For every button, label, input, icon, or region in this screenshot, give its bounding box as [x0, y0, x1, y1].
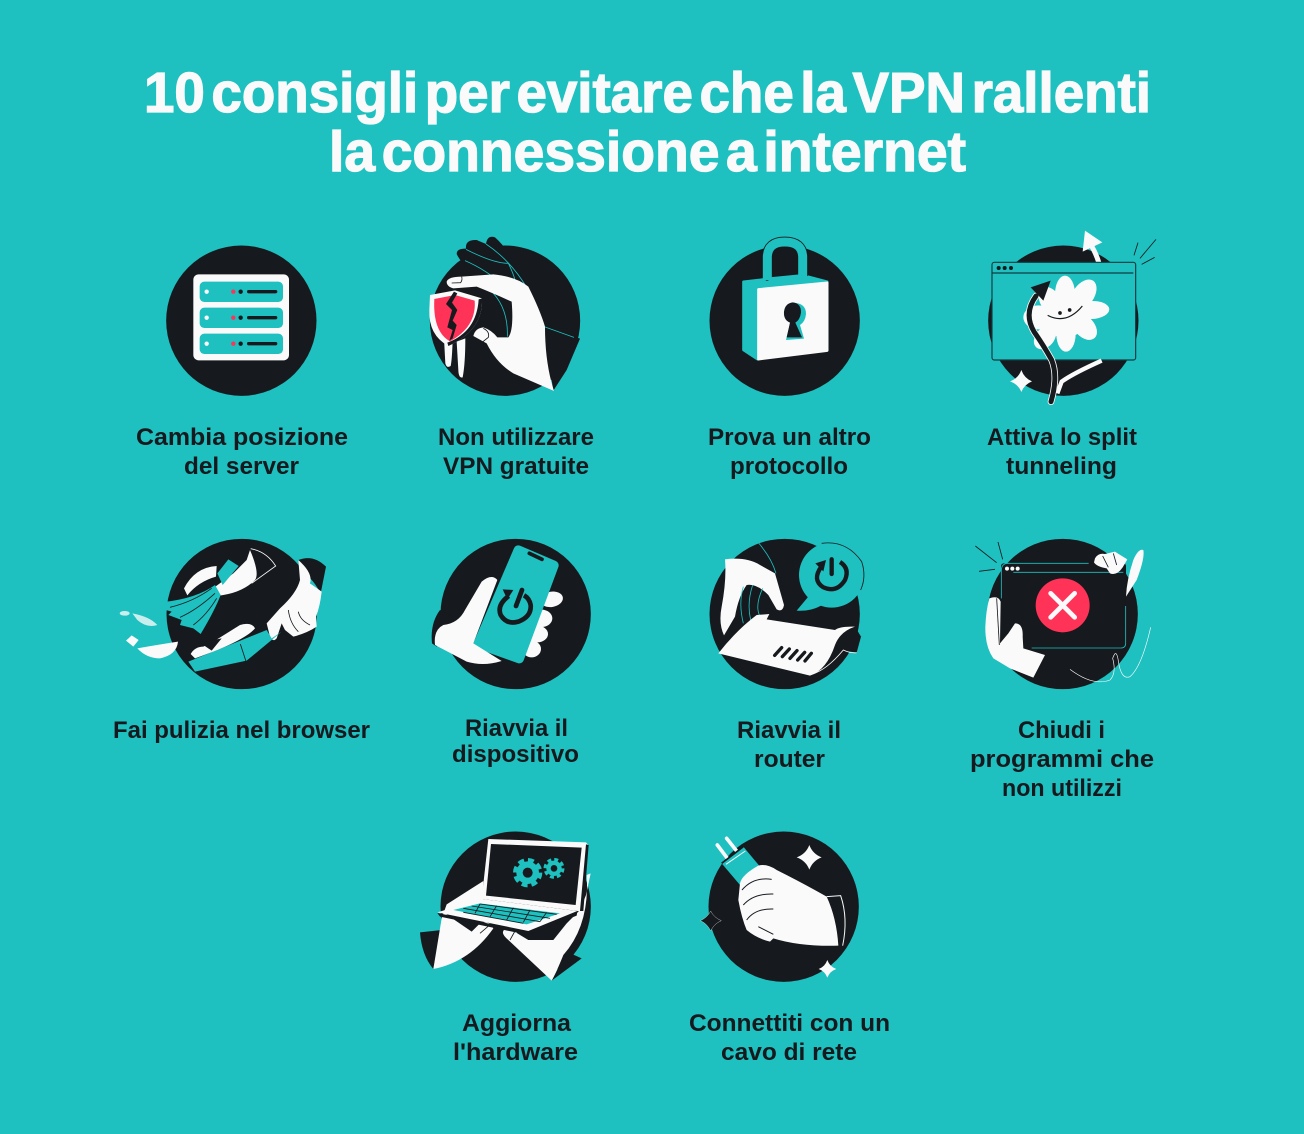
icon: ethernet cable	[700, 831, 859, 982]
gears	[515, 859, 563, 885]
black arrow	[1029, 296, 1055, 402]
title	[144, 61, 1151, 184]
label: cable: Connettiti con un	[689, 1010, 890, 1037]
title: 10 consigli per evitare che la VPN rallenti	[144, 61, 1151, 125]
label: split tunneling: tunneling	[1006, 453, 1117, 480]
label: VPN: VPN gratuite	[443, 453, 589, 480]
dust particles	[120, 611, 178, 658]
label: protocollo: Prova un altro	[708, 424, 871, 451]
hands	[1126, 550, 1144, 597]
icon: laptop hardware	[420, 831, 591, 982]
handle	[188, 630, 282, 672]
label: hardware	[453, 1010, 578, 1066]
label: device: dispositivo	[452, 741, 579, 768]
label: split tunneling: Attiva lo split	[987, 424, 1137, 451]
label: router: router	[754, 746, 825, 773]
icon: close programs window	[975, 539, 1151, 689]
label: cable	[689, 1010, 890, 1066]
icon: hand holding broken shield	[429, 237, 580, 396]
label: router: Riavvia il	[737, 717, 841, 744]
label: close programs: non utilizzi	[1002, 775, 1122, 802]
title: la connessione a internet	[329, 120, 966, 184]
label: protocollo	[708, 424, 871, 480]
icon: server	[166, 245, 316, 396]
label: browser: Fai pulizia nel browser	[113, 717, 370, 744]
label: hardware: l'hardware	[453, 1039, 578, 1066]
label: server: Cambia posizione	[136, 424, 348, 451]
router	[843, 627, 861, 653]
left hand	[433, 881, 493, 969]
label: device: Riavvia il	[465, 715, 568, 742]
label: router	[737, 717, 841, 773]
label: hardware: Aggiorna	[462, 1010, 572, 1037]
power symbol	[500, 589, 531, 622]
label: split tunneling	[987, 424, 1137, 480]
flower	[1023, 275, 1110, 354]
label: server	[136, 424, 348, 480]
icon: padlock	[709, 242, 860, 396]
speech bubble	[797, 542, 864, 611]
laptop	[482, 839, 588, 912]
label: device	[452, 715, 579, 768]
broken shield	[429, 290, 482, 378]
label: close programs: programmi che	[970, 746, 1154, 773]
icon: router restart	[709, 539, 864, 689]
right hand	[503, 873, 591, 981]
label: cable: cavo di rete	[721, 1039, 857, 1066]
close button	[1036, 578, 1090, 632]
label: close programs: Chiudi i	[1018, 717, 1105, 744]
icon: split tunneling window with flower	[988, 231, 1156, 402]
lower hand	[191, 624, 255, 658]
label: VPN: Non utilizzare	[438, 424, 594, 451]
icon: phone restart	[432, 539, 591, 689]
sparkles	[700, 845, 836, 978]
label: protocollo: protocollo	[730, 453, 848, 480]
label: close programs	[970, 717, 1154, 802]
label: server: del server	[184, 453, 299, 480]
label: VPN	[438, 424, 594, 480]
right hand	[298, 558, 326, 593]
icon: browser cleaning with brush	[120, 539, 326, 689]
